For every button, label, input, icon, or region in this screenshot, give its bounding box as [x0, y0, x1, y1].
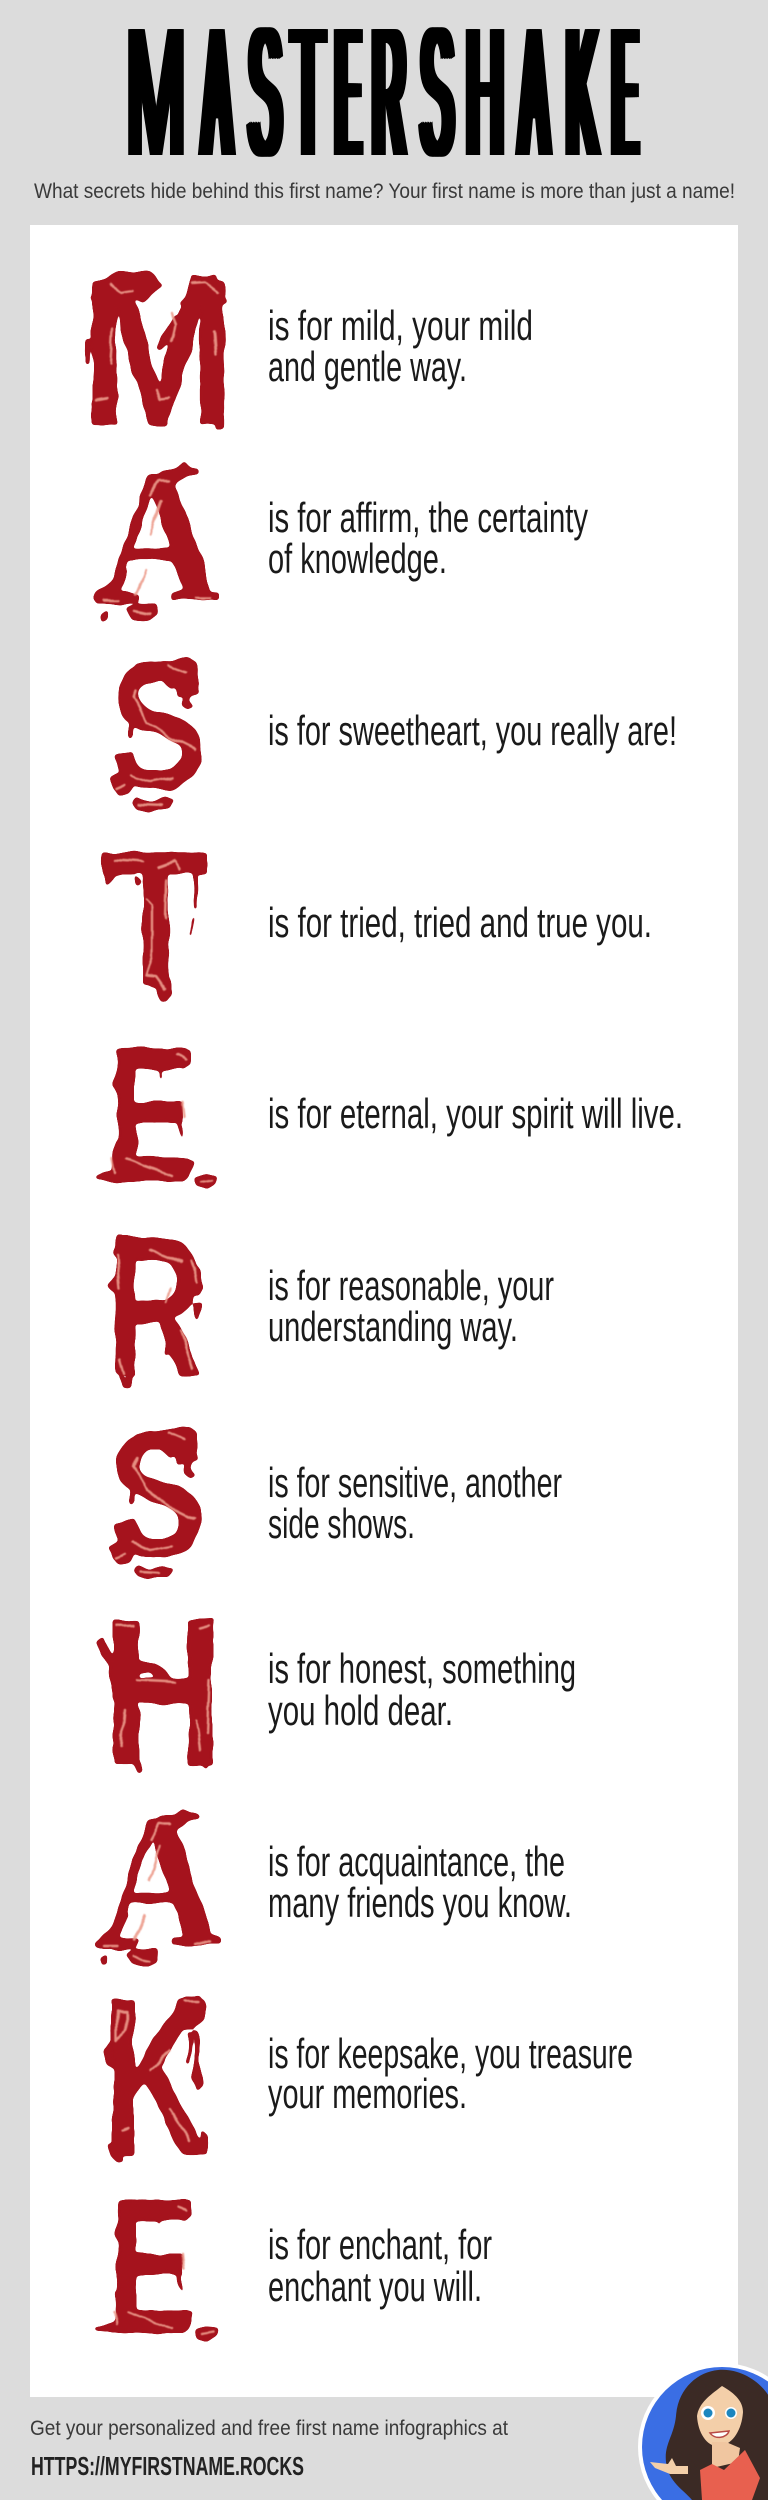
- row: A: [93, 432, 588, 642]
- avatar: cartoon woman in blue circle: [638, 2363, 768, 2500]
- icon: blood letter E: E: [109, 1008, 194, 1219]
- text: M line: is for mild, your mild: [268, 302, 533, 349]
- icon: blood letter A: A: [98, 1777, 222, 1987]
- text: H line: is for honest, something: [268, 1645, 576, 1692]
- text: E second line: is for enchant, for: [268, 2221, 492, 2268]
- icon: blood letter S: S: [109, 1393, 206, 1594]
- text: R line: understanding way.: [268, 1303, 518, 1350]
- row: E: [95, 1008, 683, 1219]
- icon: blood letter T: T: [101, 812, 210, 1026]
- footer url: HTTPS://MYFIRSTNAME.ROCKS: [31, 2451, 304, 2481]
- text: M line: [268, 302, 533, 390]
- row: S: [108, 625, 677, 826]
- text: A second line: [268, 1838, 572, 1926]
- text: E second line: [268, 2221, 492, 2310]
- icon: blood letter M: M: [80, 236, 237, 470]
- text: S second line: is for sensitive, another: [268, 1459, 562, 1506]
- row: H: [98, 1576, 576, 1810]
- row: M: [80, 236, 533, 470]
- text: K line: your memories.: [268, 2070, 467, 2117]
- text: A second line: is for acquaintance, the: [268, 1838, 565, 1885]
- row: K: [103, 1952, 633, 2204]
- row: A second: [93, 1777, 572, 1987]
- icon: blood letter E: E: [109, 2160, 194, 2371]
- text: S second line: [268, 1459, 562, 1547]
- footer text: Get your personalized and free first name infographics at: [30, 2417, 508, 2440]
- icon: blood letter E: [95, 2160, 217, 2371]
- text: A line: is for affirm, the certainty: [268, 494, 588, 541]
- row: E second: [95, 2160, 492, 2371]
- icon: blood letter R: R: [107, 1194, 203, 1417]
- row: S second: [108, 1393, 562, 1594]
- text: A second line: many friends you know.: [268, 1879, 572, 1926]
- icon: blood letter H: H: [103, 1576, 224, 1810]
- row: T: [101, 812, 652, 1026]
- text: M line: and gentle way.: [268, 343, 467, 390]
- text: A line: of knowledge.: [268, 535, 447, 582]
- text: A line: [268, 494, 588, 582]
- icon: blood letter E: [95, 1008, 217, 1219]
- text: S second line: side shows.: [268, 1500, 415, 1547]
- text: E second line: enchant you will.: [268, 2263, 482, 2310]
- row: R: [107, 1194, 554, 1417]
- title: [126, 0, 641, 194]
- text: K line: [268, 2030, 633, 2117]
- icon: blood letter K: K: [103, 1952, 208, 2204]
- text: H line: you hold dear.: [268, 1687, 453, 1734]
- text: R line: is for reasonable, your: [268, 1262, 554, 1309]
- icon: blood letter S: S: [109, 625, 206, 826]
- text: R line: [268, 1262, 554, 1350]
- icon: blood letter A: A: [98, 432, 222, 642]
- text: H line: [268, 1645, 576, 1734]
